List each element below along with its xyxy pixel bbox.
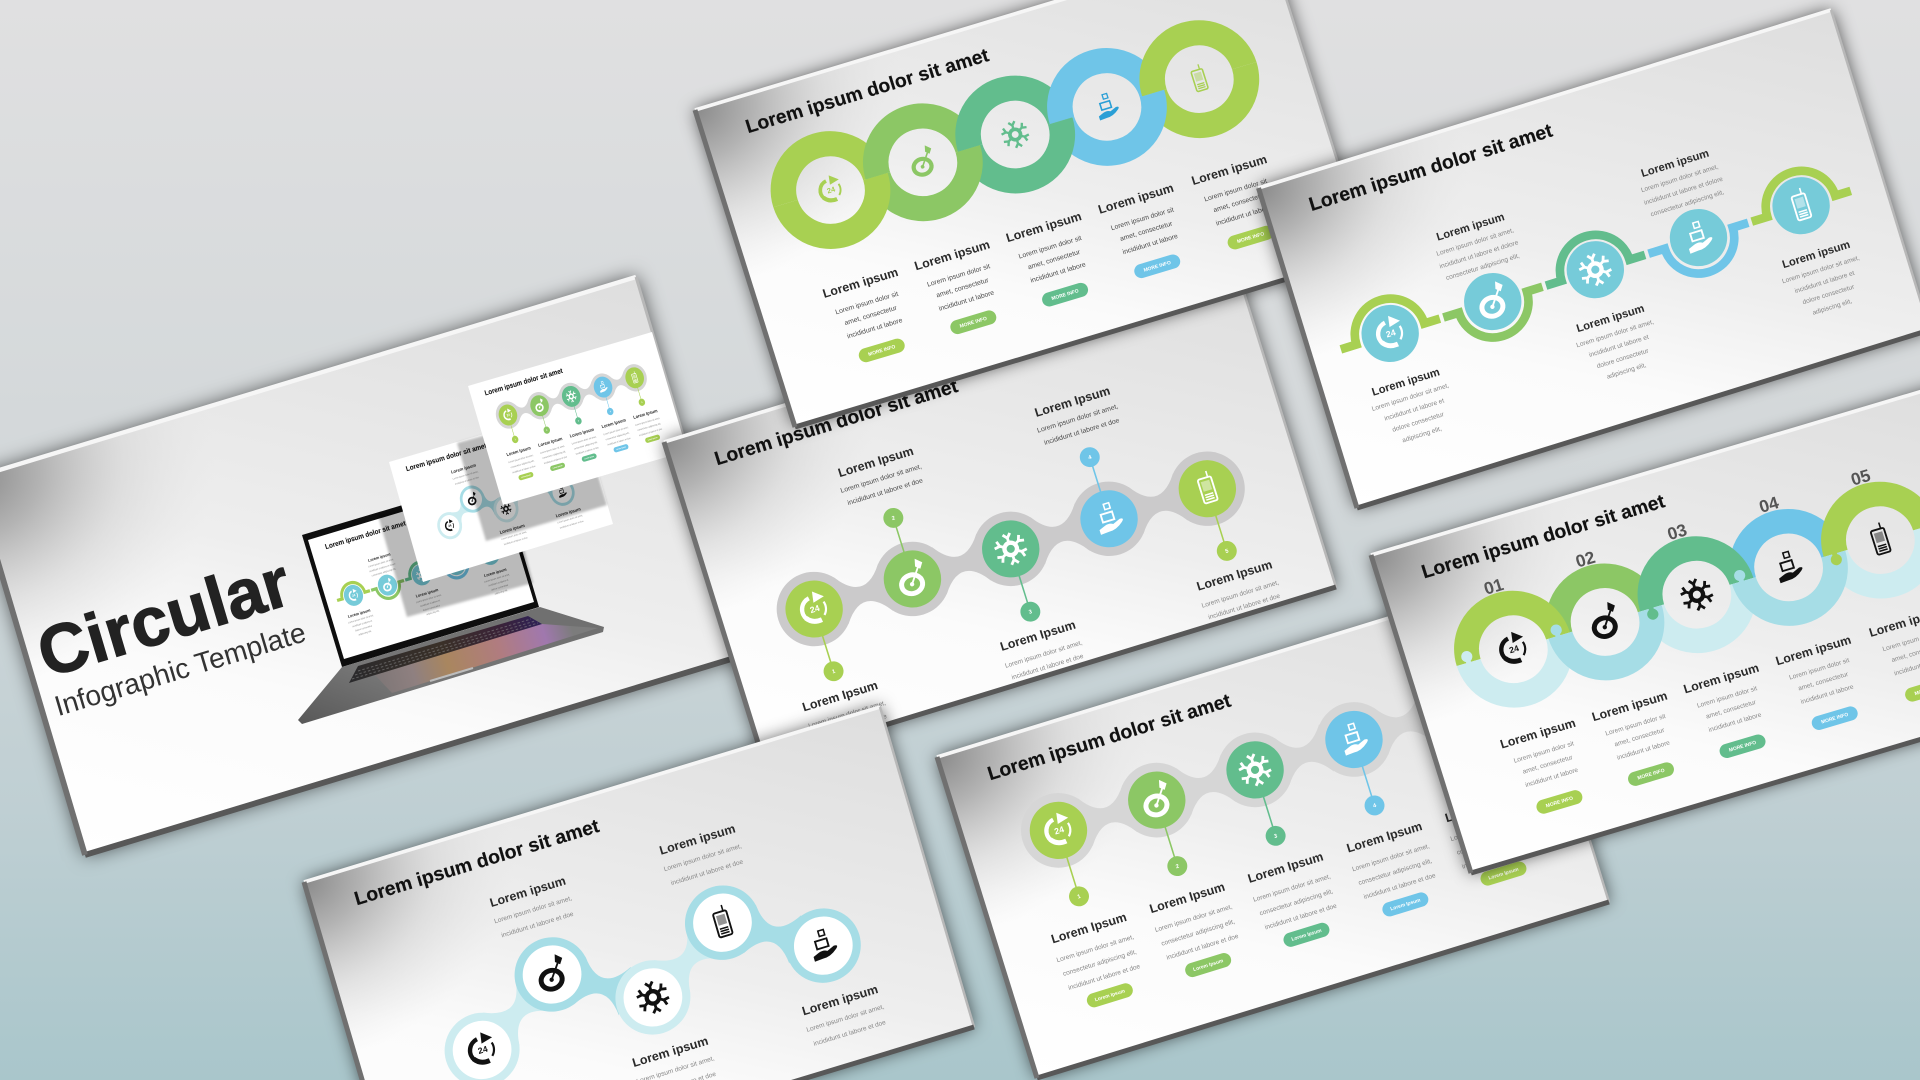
- text column 4: amet, consectetur: [1797, 671, 1850, 692]
- text column 4: Lorem ipsum dolor sit: [1110, 207, 1175, 232]
- text column 1: [1498, 716, 1590, 792]
- pins: 1: [831, 669, 836, 675]
- buttons: Lorem Ipsum: [1291, 928, 1323, 943]
- step numbers: 03: [1665, 519, 1690, 544]
- text block 4: incididunt ut labore et doe: [1363, 872, 1437, 901]
- ring chain: [772, 21, 1258, 248]
- text block 1: Lorem Ipsum: [1050, 910, 1128, 946]
- heading: Lorem ipsum dolor sit amet: [712, 376, 961, 470]
- text column 5: Lorem ipsum dolor sit: [1203, 178, 1268, 203]
- text column 1: Lorem ipsum: [1498, 716, 1577, 751]
- step numbers: 04: [1757, 492, 1781, 517]
- text blocks: Lorem ipsum dolor sit amet,: [1036, 403, 1119, 435]
- text block 2: Lorem ipsum dolor sit amet,: [1436, 227, 1515, 258]
- text block 3: [1570, 301, 1666, 387]
- text block 3: [1245, 849, 1341, 932]
- text block 5: [1442, 788, 1538, 872]
- text block 1: [1366, 365, 1462, 450]
- text block 2: Lorem ipsum dolor sit amet,: [663, 843, 743, 873]
- text block 5: Lorem Ipsum: [1443, 789, 1522, 825]
- text block 4: [1344, 819, 1440, 902]
- text block 2: [657, 821, 747, 888]
- text block 3: Lorem ipsum: [1575, 303, 1646, 335]
- heading: Lorem ipsum dolor sit amet: [743, 45, 992, 138]
- text block 3: dolore consectetur: [1596, 347, 1650, 370]
- text block 4: Lorem ipsum dolor sit amet,: [806, 1004, 885, 1034]
- text block 1: incididunt ut labore et: [1384, 397, 1445, 423]
- text column 2: Lorem ipsum dolor sit: [926, 263, 991, 289]
- buttons: MORE INFO: [959, 316, 988, 330]
- text block 1: Lorem ipsum: [1371, 366, 1441, 399]
- text block 1: Lorem ipsum dolor sit amet,: [1371, 382, 1450, 413]
- text block 1: [1048, 910, 1144, 993]
- panel: slide with numbered interlocked rings: [1371, 385, 1920, 873]
- text column 2: amet, consectetur: [936, 277, 990, 299]
- text column 2: incididunt ut labore: [1616, 739, 1671, 762]
- text column 4: [1096, 181, 1189, 259]
- pins: 4: [1088, 454, 1093, 461]
- text block 5: [1776, 237, 1872, 323]
- text column 1: amet, consectetur: [1522, 754, 1574, 776]
- text block 2: [1147, 879, 1242, 962]
- subtitle: Infographic Template: [51, 616, 309, 722]
- text blocks: Lorem Ipsum: [836, 444, 915, 480]
- icons: [816, 63, 1209, 206]
- text column 2: Lorem ipsum: [913, 237, 992, 273]
- buttons: Lorem Ipsum: [1094, 988, 1126, 1003]
- text column 5: amet, consectetur: [1213, 192, 1267, 214]
- text column 1: [821, 265, 913, 343]
- text column 3: Lorem ipsum: [1004, 209, 1083, 245]
- text block 5: incididunt ut labore et doe: [1461, 842, 1535, 871]
- panel: slide with wave arcs: [1258, 10, 1920, 508]
- buttons: [1085, 860, 1528, 1009]
- pins: [1049, 706, 1485, 909]
- buttons: Lorem Ipsum: [1390, 897, 1422, 912]
- ring chain: [1455, 483, 1920, 707]
- text block 4: [799, 982, 890, 1049]
- text block 5: consectetur adipiscing elit,: [1456, 827, 1532, 857]
- text column 1: incididunt ut labore: [846, 317, 904, 340]
- text column 4: incididunt ut labore: [1122, 233, 1179, 256]
- text column 5: Lorem ipsum: [1190, 152, 1269, 188]
- text block 1: dolore consectetur: [1392, 411, 1446, 434]
- text block 4: [1634, 146, 1728, 219]
- text block 2: consectetur adipiscing elit,: [1160, 918, 1236, 948]
- step numbers: 01: [1481, 574, 1506, 599]
- panel: cover slide: [0, 277, 748, 855]
- text block 4: Lorem ipsum dolor sit amet,: [1640, 163, 1720, 194]
- panel: slide with pinned chain, all down: [937, 581, 1609, 1078]
- buttons: Lorem Ipsum: [1488, 866, 1520, 882]
- text column 1: Lorem ipsum dolor sit: [835, 291, 899, 316]
- wave arcs: [1330, 157, 1861, 383]
- text column 4: amet, consectetur: [1119, 220, 1174, 243]
- text block 4: Lorem ipsum: [1640, 148, 1711, 180]
- floating mini slide: pins: [468, 332, 687, 505]
- text blocks: Lorem ipsum dolor sit amet,: [1004, 640, 1084, 670]
- text column 3: amet, consectetur: [1705, 699, 1758, 720]
- text block 3: Lorem Ipsum: [1246, 850, 1325, 886]
- panel: slide with pinned chain, alternating: [664, 267, 1336, 762]
- text column 1: Lorem ipsum dolor sit: [1513, 740, 1575, 765]
- heading: Lorem ipsum dolor sit amet: [1419, 491, 1668, 583]
- text block 3: Lorem ipsum: [631, 1034, 710, 1070]
- text blocks: incididunt ut labore et doe: [1043, 417, 1121, 447]
- circles: [1354, 170, 1837, 369]
- buttons: MORE INFO: [1821, 712, 1849, 726]
- pins: [782, 415, 1239, 684]
- buttons: MORE INFO: [1637, 768, 1666, 781]
- text column 3: amet, consectetur: [1027, 249, 1082, 271]
- text column 5: [1190, 152, 1282, 230]
- text column 3: [1004, 209, 1097, 288]
- text column 2: Lorem ipsum: [1590, 689, 1669, 724]
- text column 4: Lorem ipsum dolor sit: [1788, 657, 1850, 682]
- text blocks: Lorem Ipsum: [1033, 384, 1112, 420]
- text blocks: [737, 353, 1284, 742]
- text column 2: Lorem ipsum dolor sit: [1605, 713, 1667, 737]
- text block 3: [630, 1033, 720, 1080]
- text block 2: Lorem ipsum dolor sit amet,: [1154, 904, 1233, 934]
- text blocks: incididunt ut labore et doe: [814, 713, 888, 742]
- text block 4: consectetur adipiscing elit,: [1358, 858, 1433, 887]
- laptop mockup: [298, 476, 604, 724]
- text column 3: Lorem ipsum dolor sit: [1018, 235, 1083, 260]
- text block 2: incididunt ut labore et doe: [670, 858, 744, 887]
- circles: [421, 850, 870, 1080]
- text blocks: Lorem ipsum dolor sit amet,: [1201, 579, 1280, 610]
- icons: [1373, 186, 1812, 352]
- text block 5: Lorem ipsum dolor sit amet,: [1450, 813, 1529, 843]
- text column 2: amet, consectetur: [1614, 727, 1666, 748]
- step numbers: 05: [1848, 465, 1873, 490]
- text column 5: [1867, 604, 1920, 681]
- text column 4: [1774, 633, 1866, 709]
- pins: 3: [1028, 609, 1033, 616]
- text block 2: incididunt ut labore et dolore: [1439, 239, 1520, 270]
- text block 1: incididunt ut labore et doe: [501, 911, 575, 939]
- text block 1: Lorem ipsum dolor sit amet,: [1056, 934, 1135, 964]
- text block 5: dolore consectetur: [1802, 283, 1856, 306]
- text column 5: incididunt ut labore: [1215, 204, 1272, 227]
- panel: slide with zig-zag chain: [304, 707, 974, 1080]
- buttons: MORE INFO: [1545, 796, 1574, 809]
- pins: 5: [1225, 548, 1229, 555]
- heading: Lorem ipsum dolor sit amet: [352, 816, 602, 910]
- text blocks: incididunt ut labore et doe: [847, 477, 924, 507]
- pins: 3: [1273, 833, 1278, 840]
- text block 4: incididunt ut labore et dolore: [1643, 176, 1724, 207]
- text block 2: Lorem ipsum: [658, 822, 737, 858]
- pins: 4: [1372, 803, 1378, 810]
- text column 3: incididunt ut labore: [1708, 712, 1763, 734]
- text column 1: amet, consectetur: [844, 304, 899, 327]
- step numbers: [1481, 465, 1873, 599]
- text block 1: Lorem ipsum dolor sit amet,: [493, 895, 573, 925]
- buttons: MORE INFO: [1236, 231, 1265, 245]
- buttons: MORE INFO: [868, 344, 896, 358]
- text block 3: consectetur adipiscing elit,: [1259, 888, 1334, 917]
- circles: [778, 453, 1243, 645]
- text block 4: incididunt ut labore et doe: [813, 1019, 887, 1048]
- text block 1: [487, 873, 577, 940]
- pins: 5: [1471, 773, 1475, 779]
- buttons: [1534, 676, 1920, 815]
- text block 5: Lorem ipsum dolor sit amet,: [1781, 255, 1861, 285]
- text block 2: Lorem Ipsum: [1148, 880, 1227, 916]
- text blocks: incididunt ut labore et doe: [1011, 653, 1085, 681]
- text column 2: [913, 237, 1005, 316]
- text block 1: adipiscing elit,: [1401, 425, 1443, 444]
- pins: 2: [1175, 864, 1180, 870]
- text block 5: Lorem ipsum: [1781, 239, 1852, 271]
- floating mini slide: zig-zag: [389, 406, 613, 582]
- text column 2: [1590, 689, 1682, 765]
- text blocks: Lorem Ipsum: [1195, 557, 1274, 594]
- zig-zag connectors: [476, 893, 813, 1053]
- text blocks: Lorem Ipsum: [801, 678, 880, 714]
- text block 2: consectetur adipiscing elit,: [1445, 253, 1521, 282]
- text blocks: Lorem ipsum dolor sit amet,: [808, 700, 887, 730]
- heading: Lorem ipsum dolor sit amet: [985, 691, 1234, 785]
- text blocks: incididunt ut labore et doe: [1208, 593, 1281, 621]
- text block 1: incididunt ut labore et doe: [1067, 963, 1141, 992]
- text block 2: incididunt ut labore et doe: [1166, 933, 1240, 962]
- text block 4: Lorem ipsum: [800, 982, 880, 1018]
- text block 2: Lorem ipsum: [1435, 211, 1506, 244]
- pins: 1: [1077, 894, 1082, 900]
- icons: [451, 875, 840, 1068]
- text block 1: Lorem ipsum: [488, 874, 567, 910]
- jigsaw nubs: [1460, 541, 1843, 675]
- buttons: MORE INFO: [1051, 288, 1080, 302]
- icons: [1496, 520, 1892, 667]
- title: Circular: Circular: [29, 543, 299, 692]
- text blocks: Lorem ipsum dolor sit amet,: [840, 463, 923, 495]
- pins: 2: [891, 515, 896, 522]
- buttons: Lorem Ipsum: [1193, 958, 1225, 973]
- heading: Lorem ipsum dolor sit amet: [1307, 120, 1556, 216]
- text column 4: incididunt ut labore: [1800, 683, 1855, 706]
- buttons: [856, 224, 1276, 364]
- text block 5: incididunt ut labore et: [1794, 270, 1856, 295]
- text block 4: consectetur adipiscing elit,: [1650, 189, 1725, 218]
- text column 3: Lorem ipsum: [1682, 661, 1761, 696]
- text block 3: Lorem ipsum dolor sit amet,: [1576, 319, 1655, 349]
- buttons: MORE INFO: [1728, 740, 1757, 754]
- text block 1: consectetur adipiscing elit,: [1062, 949, 1138, 978]
- text column 3: incididunt ut labore: [1030, 261, 1087, 285]
- text block 3: adipiscing elit,: [1606, 362, 1647, 381]
- text column 4: Lorem ipsum: [1096, 181, 1175, 217]
- text blocks: Lorem Ipsum: [998, 618, 1077, 654]
- text block 2: [1430, 209, 1523, 283]
- text block 4: Lorem ipsum dolor sit amet,: [1351, 843, 1431, 873]
- step numbers: 02: [1573, 547, 1598, 571]
- text column 4: Lorem ipsum: [1774, 633, 1853, 668]
- text column 2: incididunt ut labore: [938, 290, 995, 313]
- icons: [797, 469, 1219, 627]
- text column 1: incididunt ut labore: [1525, 767, 1579, 789]
- text block 3: incididunt ut labore et: [1588, 334, 1650, 359]
- text block 5: adipiscing elit,: [1812, 298, 1853, 317]
- icons: [1041, 689, 1463, 849]
- text column 3: Lorem ipsum dolor sit: [1696, 685, 1758, 710]
- chain backing: [767, 442, 1254, 656]
- text column 3: [1682, 661, 1774, 737]
- text block 3: incididunt ut labore et doe: [1264, 903, 1338, 931]
- buttons: MORE INFO: [1143, 260, 1172, 274]
- panel: slide with interlocked rings: [695, 0, 1367, 427]
- circles: [1023, 673, 1488, 866]
- chain backing: [1012, 663, 1499, 877]
- text block 3: Lorem ipsum dolor sit amet,: [1252, 873, 1332, 904]
- text column 1: Lorem ipsum: [821, 265, 900, 301]
- text block 4: Lorem Ipsum: [1345, 819, 1424, 855]
